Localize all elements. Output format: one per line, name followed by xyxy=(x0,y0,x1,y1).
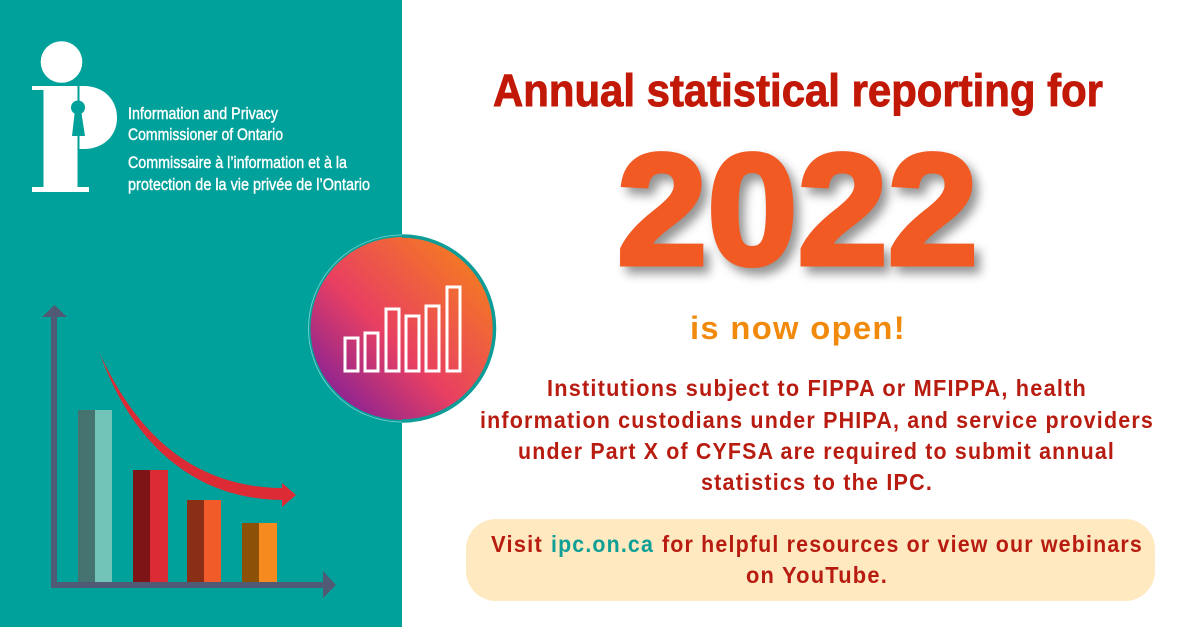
heading: Annual statistical reporting for xyxy=(493,65,1103,116)
bar 3 xyxy=(187,500,221,582)
text block: requirement: statistics to the IPC. xyxy=(701,469,933,495)
text: French name: Commissaire à l’information et à la xyxy=(128,154,348,172)
panel: teal left panel xyxy=(0,0,402,627)
text: English name: Commissioner of Ontario xyxy=(128,126,283,144)
icon: gradient circle with bar chart xyxy=(308,235,494,422)
chart axes xyxy=(42,305,336,598)
callout: resources: for helpful resources or view our webinars xyxy=(662,531,1143,557)
text block: requirement: information custodians under PHIPA, and service providers xyxy=(480,407,1154,433)
bar 1 xyxy=(78,410,112,582)
subheading: is now open! xyxy=(690,310,906,346)
callout: resources: on YouTube. xyxy=(746,562,888,588)
bar 4 xyxy=(242,523,277,582)
bar 2 xyxy=(133,470,168,582)
callout: resources: ipc.on.ca xyxy=(551,531,654,557)
text block: requirement xyxy=(480,375,1154,495)
text block: requirement: Institutions subject to FIPPA or MFIPPA, health xyxy=(547,375,1087,401)
text block: requirement: under Part X of CYFSA are required to submit annual xyxy=(518,438,1115,464)
callout: resources xyxy=(466,519,1155,601)
callout: resources: Visit xyxy=(491,531,543,557)
arrow: downward trend xyxy=(100,354,296,507)
logo: IPC emblem and name xyxy=(32,41,370,194)
text: French name: protection de la vie privée de l’Ontario xyxy=(128,176,370,194)
chart: declining bar chart xyxy=(42,305,336,598)
text: English name xyxy=(128,105,283,144)
icon: IP emblem xyxy=(32,41,117,192)
text: English name: Information and Privacy xyxy=(128,105,279,123)
text: French name xyxy=(128,154,370,194)
year 2022: 2022 xyxy=(617,122,978,298)
